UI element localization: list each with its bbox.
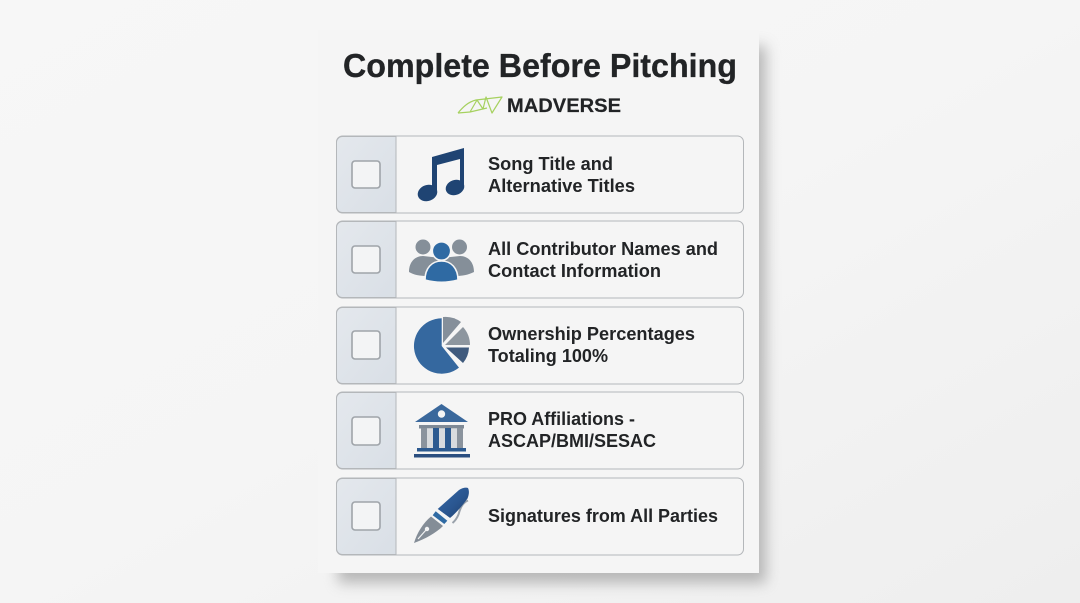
row 3: ownership <box>336 307 744 384</box>
label: All Contributor Names and <box>488 239 718 259</box>
label <box>488 324 695 366</box>
label: Totaling 100% <box>488 346 608 366</box>
checkbox <box>352 417 380 445</box>
label: PRO Affiliations - <box>488 409 635 429</box>
label: Alternative Titles <box>488 176 635 196</box>
label: ASCAP/BMI/SESAC <box>488 431 656 451</box>
icon: group of people <box>409 240 474 282</box>
title: Complete Before Pitching <box>343 47 737 84</box>
row 2: contributors <box>336 221 744 298</box>
icon: pie chart <box>414 317 470 374</box>
label: Ownership Percentages <box>488 324 695 344</box>
label <box>488 409 656 451</box>
checkbox <box>352 161 380 188</box>
label: Song Title and <box>488 154 613 174</box>
icon: fountain pen <box>414 488 469 543</box>
paper shadow <box>338 46 766 583</box>
checklist sheet <box>318 30 759 573</box>
checkbox <box>352 331 380 359</box>
label <box>488 154 635 196</box>
row 5: signatures <box>336 478 744 555</box>
brand logo <box>458 96 621 117</box>
icon: institution building <box>414 404 470 458</box>
brand name: MADVERSE <box>507 96 621 117</box>
checkbox <box>352 502 380 530</box>
checkbox <box>352 246 380 273</box>
icon: music note <box>415 148 466 204</box>
label: Signatures from All Parties <box>488 506 718 526</box>
label: Contact Information <box>488 261 661 281</box>
icon: Madverse wave mark <box>458 97 502 113</box>
row 1: song title <box>336 136 744 213</box>
label <box>488 239 718 281</box>
row 4: PRO <box>336 392 744 469</box>
